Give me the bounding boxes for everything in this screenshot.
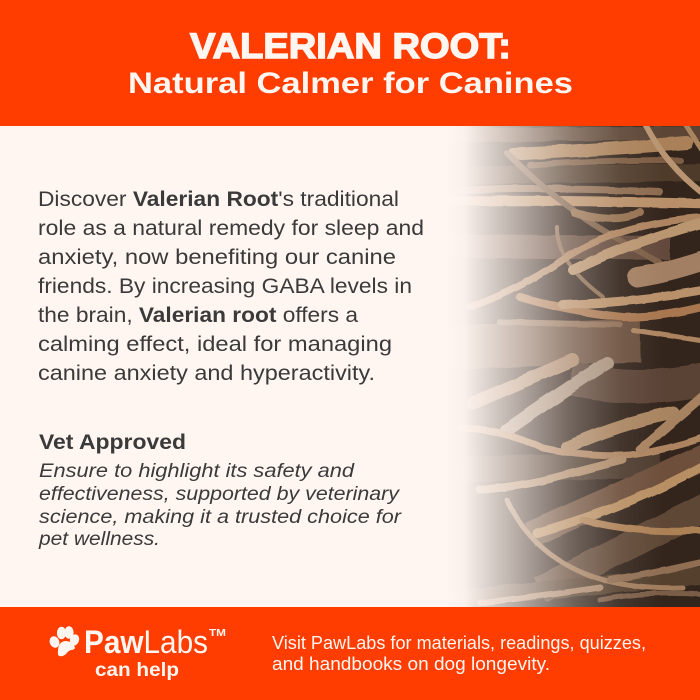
vet approved heading: Vet Approved [39,431,186,454]
icon: paw print [48,626,81,656]
vet approved description [38,461,402,550]
vet approved description: effectiveness, supported by veterinary [39,484,401,505]
intro paragraph: friends. By increasing GABA levels in [38,274,412,298]
logo [48,624,226,681]
footer message: and handbooks on dog longevity. [272,654,550,674]
intro paragraph [38,187,424,385]
title line 2: Natural Calmer for Canines [128,67,573,100]
title line 1: VALERIAN ROOT: [190,27,511,66]
header banner [0,0,700,126]
white fade overlay [440,126,644,607]
can help: can help [95,660,179,681]
vet approved description: science, making it a trusted choice for [39,507,402,528]
vet approved description: pet wellness. [38,529,160,550]
pale roots [455,120,700,603]
intro paragraph: role as a natural remedy for sleep and [38,216,424,240]
footer message: Visit PawLabs for materials, readings, quizzes, [272,633,646,653]
intro paragraph: the brain, Valerian root offers a [38,303,358,327]
footer banner [0,607,700,700]
intro paragraph: Discover Valerian Root 's traditional [38,187,399,211]
vet approved description: Ensure to highlight its safety and [39,461,356,482]
intro paragraph: anxiety, now benefiting our canine [38,245,396,269]
logo wordmark: PawLabs [84,624,208,660]
trademark: TM [209,628,226,639]
intro paragraph: canine anxiety and hyperactivity. [38,361,375,385]
footer message [272,633,646,674]
intro paragraph: calming effect, ideal for managing [38,332,392,356]
photo: valerian roots [466,126,700,607]
dark bark shapes [484,126,700,602]
